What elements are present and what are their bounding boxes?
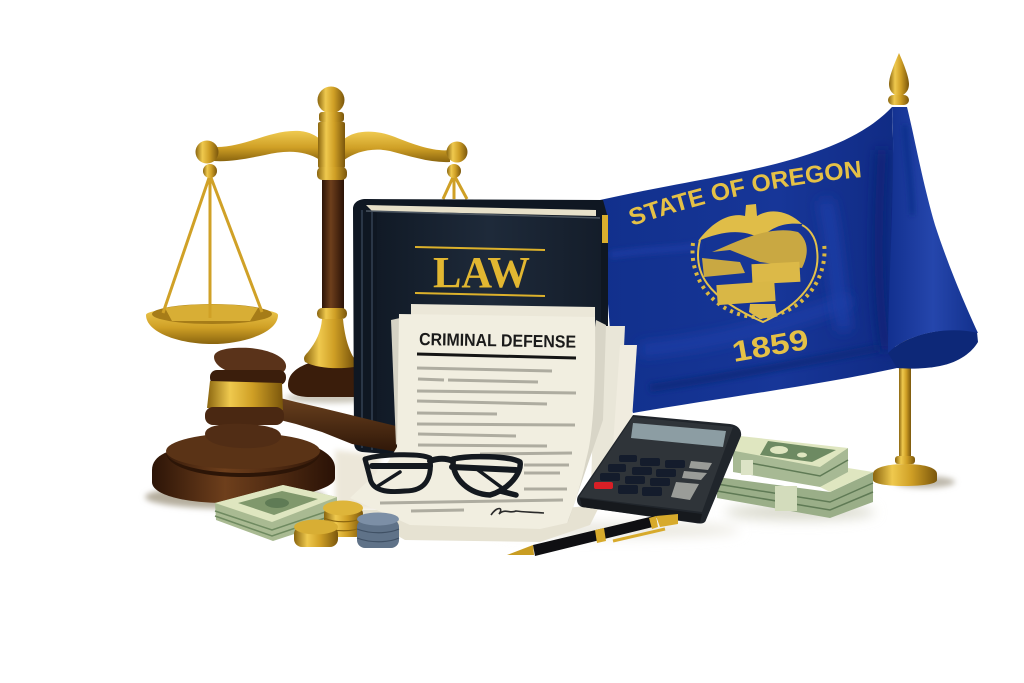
flag cloth wrinkles (610, 150, 886, 388)
main page (350, 314, 595, 529)
document title: CRIMINAL DEFENSE (419, 329, 576, 352)
left cash bundle (215, 485, 337, 541)
scale column (288, 86, 354, 397)
flag fold at pole (888, 107, 978, 369)
calculator side keys (671, 461, 712, 500)
gavel handle (280, 398, 397, 452)
book ribbon (602, 215, 608, 243)
gold coin stack (323, 500, 363, 537)
coin stacks (294, 500, 399, 548)
document rule (417, 354, 576, 358)
flag body (600, 107, 897, 413)
pen (507, 514, 678, 556)
gavel head (205, 348, 286, 448)
flag year: 1859 (730, 324, 811, 369)
table shadows (145, 393, 955, 537)
lower cash stack (717, 468, 873, 518)
state seal (692, 204, 824, 322)
law book (353, 199, 608, 455)
calculator (577, 415, 741, 524)
right cash stacks (717, 436, 873, 518)
illustration: Oregon criminal defense law still life (142, 53, 978, 556)
calculator red key (594, 482, 613, 489)
seal shore scene (702, 258, 745, 277)
upper cash stack (733, 436, 848, 487)
seal eagle (698, 204, 802, 241)
back pages (590, 326, 625, 520)
signature (491, 508, 544, 515)
document body lines (380, 368, 576, 511)
Oregon state flag (600, 107, 978, 413)
silver blue coins (357, 512, 399, 548)
seal mountains (712, 230, 807, 268)
calculator keys (600, 455, 685, 496)
single gold coins (294, 520, 338, 547)
scale beam (196, 131, 468, 164)
scale left pan (146, 164, 278, 344)
stack of papers (350, 304, 637, 542)
scales of justice (146, 86, 468, 397)
book lettering: LAW (433, 248, 530, 297)
scale right hanger (443, 164, 467, 199)
sound block (152, 433, 335, 503)
eyeglasses (365, 455, 520, 495)
calculator display (631, 423, 726, 447)
flag title: STATE OF OREGON (629, 160, 861, 224)
flag pole and stand (873, 53, 937, 486)
gavel and sound block (152, 348, 397, 503)
